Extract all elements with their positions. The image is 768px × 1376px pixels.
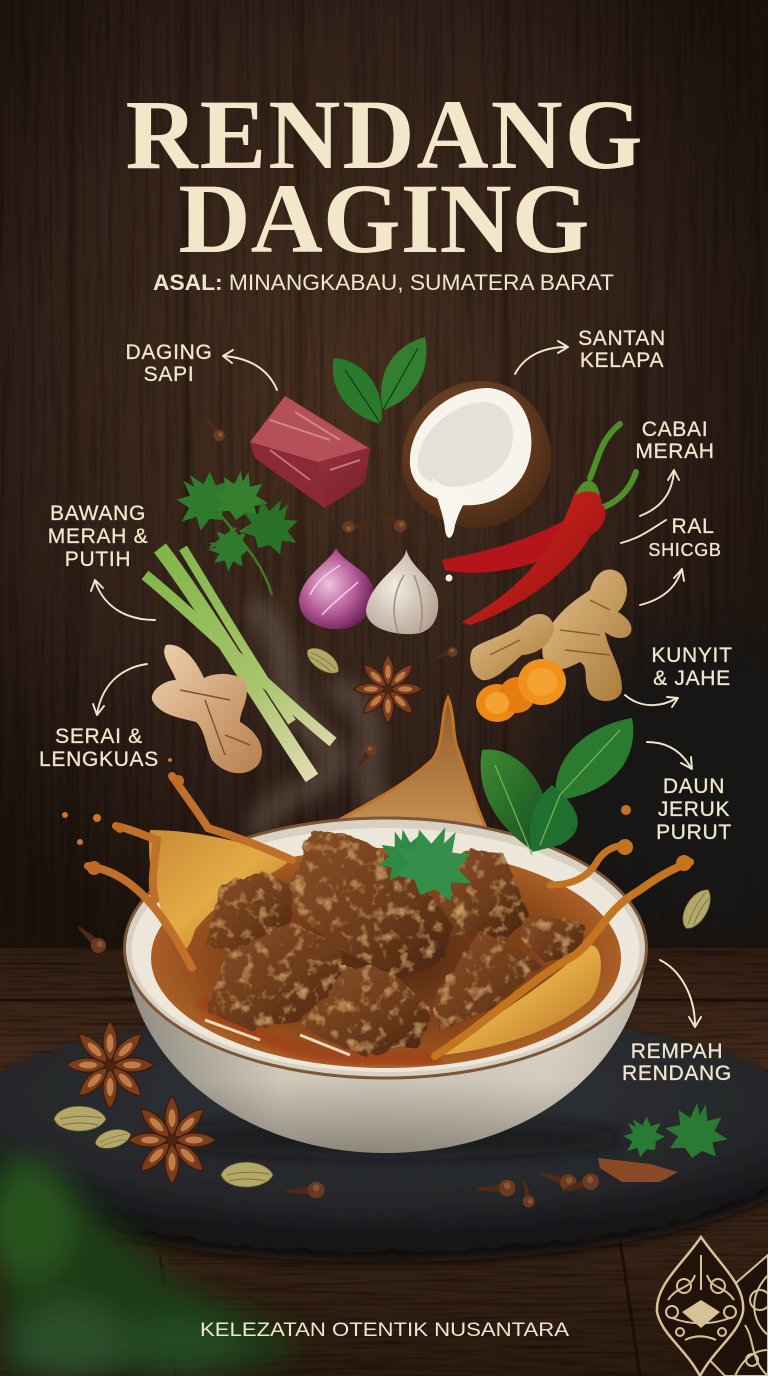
icon: raw beef [250,396,370,508]
icon: basil leaves [333,337,427,424]
label: rempah rendang: REMPAH [631,1040,723,1063]
title: RENDANG [126,79,642,190]
icon: garlic [366,549,438,634]
icon: kaffir lime leaves [481,718,633,855]
bowl [124,818,647,1153]
title [126,79,642,274]
label: kunyit dan jahe: & JAHE [653,667,731,690]
spices on slate: cloves and cinnamon [286,1158,678,1208]
label: daging sapi: SAPI [144,363,194,386]
icon: ginger root [470,570,632,701]
spices on slate: star anise [66,1021,216,1184]
icon: galangal root [152,645,262,773]
bowl shadow [155,1118,625,1158]
arrow: cabai merah [640,470,679,516]
icon: cardamom floating [303,643,717,933]
background: dark wood wall [0,0,768,960]
icon: halved coconut with milk [402,381,551,582]
icon: lemongrass [145,548,333,778]
rendang beef chunks [205,830,585,1056]
label: daging sapi: DAGING [125,341,213,364]
foreground blurred plant [0,1150,300,1376]
label: santan kelapa: SANTAN [578,327,666,350]
label: bawang merah dan putih: BAWANG [50,502,146,525]
tagline: KELEZATAN OTENTIK NUSANTARA [200,1320,569,1341]
label: serai dan lengkuas: SERAI & [55,725,143,748]
spices on slate: cardamom [54,1106,273,1187]
arrow: bawang [91,580,155,620]
icon: cloves floating [74,416,459,956]
arrow: kunyit [625,695,678,707]
label: rempah rendang: RENDANG [622,1062,732,1085]
background: wooden table [0,948,768,1376]
subtitle: ASAL: MINANGKABAU, SUMATERA BARAT [153,270,614,295]
icon: parsley [162,457,311,595]
label: cabai merah: CABAI [642,418,708,441]
parsley garnish [370,812,488,913]
label: santan kelapa: KELAPA [580,349,664,372]
icon: shallot [299,548,374,629]
label: bawang merah dan putih: PUTIH [65,548,131,571]
arrow: garbled spice label [621,520,666,543]
batik ornament [657,1237,768,1376]
splash right: curry sheet and strands [435,805,692,1056]
slate serving board [0,1008,768,1262]
parsley on slate [614,1098,733,1164]
label: garbled spice label: RAL [672,515,714,538]
arrow: santan kelapa [515,341,568,374]
curry sauce [151,848,621,1068]
arrow: serai [93,664,147,715]
arrow: daging sapi [223,350,277,390]
arrow: daun jeruk [647,742,692,769]
icon: red chilies [442,424,636,625]
label: bawang merah dan putih: MERAH & [48,525,148,548]
label: daun jeruk purut: JERUK [658,798,730,821]
splash left: curry sheet [62,758,292,968]
label: kunyit dan jahe: KUNYIT [651,644,733,667]
label: daun jeruk purut: PURUT [656,821,732,844]
icon: star anise floating [354,655,422,723]
label: daun jeruk purut: DAUN [663,775,725,798]
label: garbled spice label: SHICGB [648,540,722,560]
arrow: rempah [660,960,701,1027]
arrow: ginger to spice label [640,569,684,605]
icon: turmeric slices [476,659,566,722]
label: serai dan lengkuas: LENGKUAS [39,748,159,771]
label: cabai merah: MERAH [635,440,715,463]
steam [260,610,390,825]
title: DAGING [178,163,590,274]
splash back: curry sheet above bowl [335,698,497,850]
